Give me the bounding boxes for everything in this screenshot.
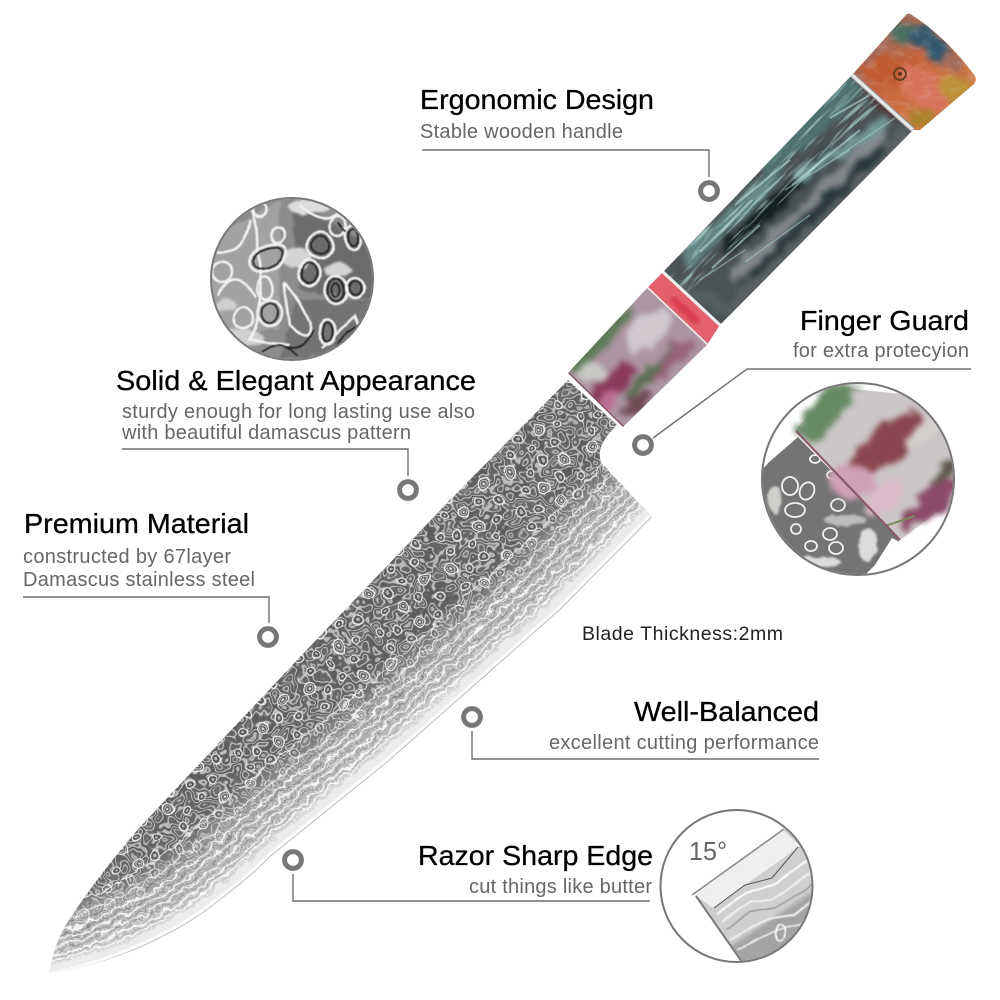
callout: solid and elegant appearance — [116, 365, 476, 498]
callout: ergonomic design: Ergonomic Design — [420, 84, 654, 115]
callout: premium material: Premium Material — [24, 508, 249, 539]
inset: finger guard detail — [758, 383, 965, 585]
blade — [50, 380, 652, 973]
callout: well balanced: excellent cutting performance — [549, 732, 819, 754]
silver rings — [647, 75, 913, 345]
callout: finger guard: Finger Guard — [800, 305, 969, 336]
angle label: 15° — [689, 836, 727, 866]
callout: ergonomic design — [420, 84, 717, 199]
handle end cap — [852, 14, 976, 130]
inset: damascus pattern detail — [205, 195, 380, 365]
callout: razor sharp edge: Razor Sharp Edge — [418, 840, 653, 871]
callout: ergonomic design: Stable wooden handle — [420, 121, 623, 143]
red spacer — [647, 272, 720, 345]
finger guard — [562, 288, 707, 427]
callout: finger guard — [635, 305, 971, 453]
callout: premium material — [23, 508, 276, 645]
callout: solid and elegant appearance: with beautiful damascus pattern — [121, 422, 411, 444]
inset: 15 degree edge detail — [660, 810, 820, 970]
callout: razor sharp edge — [285, 840, 653, 901]
callout: premium material: Damascus stainless steel — [23, 569, 255, 591]
callout: well balanced — [464, 696, 819, 759]
callout: solid and elegant appearance: Solid & Elegant Appearance — [116, 365, 476, 396]
callout: razor sharp edge: cut things like butter — [469, 876, 652, 898]
handle main body — [663, 75, 913, 325]
blade thickness note: Blade Thickness:2mm — [582, 623, 783, 645]
callout: solid and elegant appearance: sturdy enough for long lasting use also — [122, 401, 475, 423]
callout: well balanced: Well-Balanced — [634, 696, 819, 727]
callout: premium material: constructed by 67layer — [23, 546, 231, 568]
callout: finger guard: for extra protecyion — [793, 340, 969, 362]
